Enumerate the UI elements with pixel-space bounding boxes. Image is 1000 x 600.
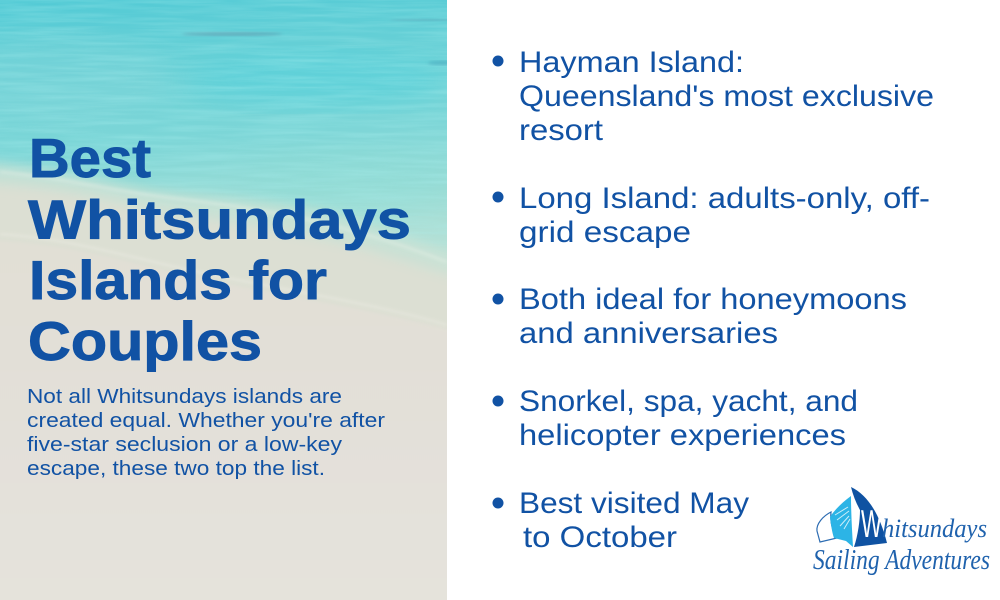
title: Best xyxy=(29,127,151,189)
bullet: experiences: helicopter experiences xyxy=(519,419,846,452)
bullet: Hayman Island: Queensland's most exclusive xyxy=(519,80,934,113)
bullet: experiences: Snorkel, spa, yacht, and xyxy=(519,385,858,418)
bullet: best time: to October xyxy=(523,521,677,554)
intro text: escape, these two top the list. xyxy=(27,457,325,480)
logo text line 1: hitsundays xyxy=(882,514,987,543)
bullet: Hayman Island: Hayman Island: xyxy=(519,46,744,79)
icon: outline sail xyxy=(817,512,837,542)
bullet: honeymoons xyxy=(492,283,907,350)
bullet: Hayman Island xyxy=(492,46,934,147)
bullet: experiences xyxy=(492,385,858,452)
icon: light blue sail xyxy=(830,496,853,547)
bullet: Hayman Island: resort xyxy=(519,114,603,147)
bullet: best time: Best visited May xyxy=(519,487,749,520)
title: Whitsundays xyxy=(28,188,411,250)
icon: sun rays xyxy=(835,507,850,529)
title: Islands for xyxy=(29,249,327,311)
icon: dark blue sail xyxy=(851,487,887,547)
intro text: Not all Whitsundays islands are xyxy=(27,385,342,408)
bullet: Long Island xyxy=(492,182,930,249)
bullet: best time xyxy=(492,487,749,554)
logo: Whitsundays Sailing Adventures xyxy=(813,487,990,576)
bullet: Long Island: grid escape xyxy=(519,216,691,249)
logo W: W xyxy=(861,503,882,546)
bullet: Long Island: Long Island: adults-only, off- xyxy=(519,182,930,215)
bullet: honeymoons: and anniversaries xyxy=(519,317,778,350)
intro text xyxy=(27,385,385,480)
title: Couples xyxy=(28,310,262,372)
panel: beach photo background xyxy=(0,0,467,600)
bullet: honeymoons: Both ideal for honeymoons xyxy=(519,283,907,316)
intro text: created equal. Whether you're after xyxy=(27,409,385,432)
title xyxy=(28,127,411,372)
intro text: five-star seclusion or a low-key xyxy=(27,433,343,456)
